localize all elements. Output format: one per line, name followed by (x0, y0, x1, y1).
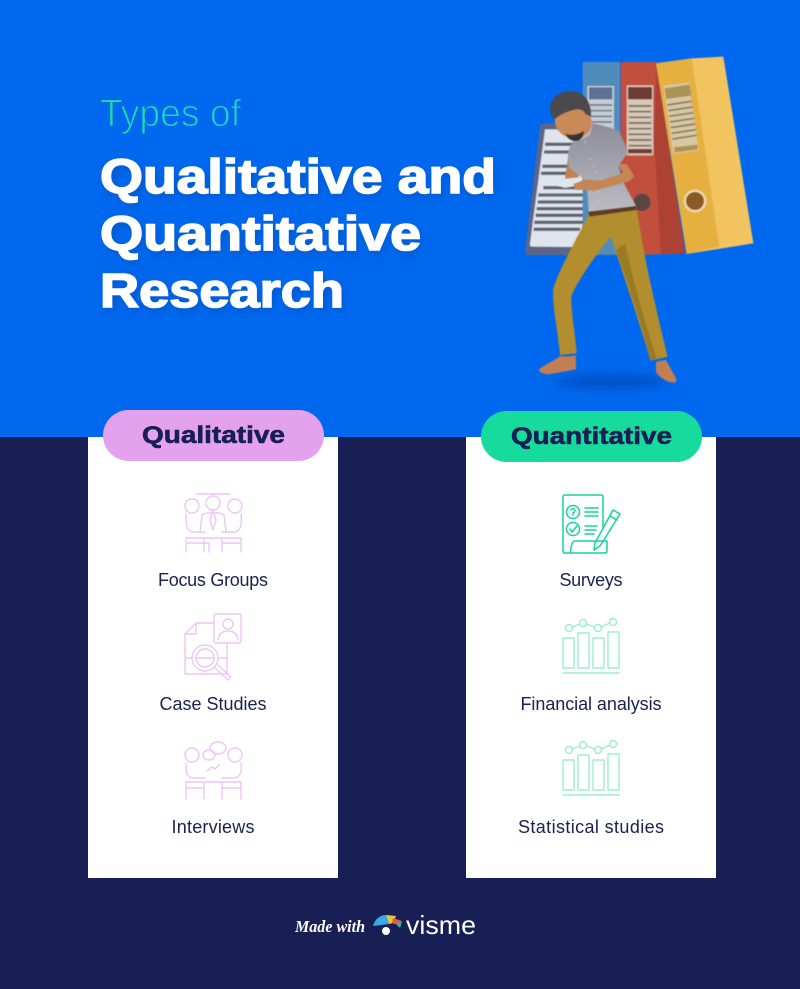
panel: quantitative (466, 411, 716, 878)
pill heading: Quantitative: Quantitative (511, 423, 672, 450)
label: Statistical studies: Statistical studies (518, 817, 664, 837)
card background (466, 437, 716, 878)
title: Research (100, 265, 344, 318)
title: Qualitative and (103, 155, 497, 208)
pill heading: Qualitative (103, 410, 324, 461)
floor shadow (553, 375, 667, 388)
label: Financial analysis: Financial analysis (520, 694, 662, 714)
label: Focus Groups: Focus Groups (158, 570, 268, 590)
man (539, 91, 677, 383)
shoes (539, 355, 576, 374)
head (550, 100, 597, 144)
binder: blue (583, 62, 620, 255)
pill heading: Quantitative (481, 411, 702, 462)
icon: interviews (185, 742, 242, 799)
icon: bar chart financial (563, 618, 619, 673)
header background (0, 0, 800, 437)
label: Interviews: Interviews (172, 817, 254, 837)
shirt (568, 123, 636, 213)
icon: bar chart statistical (563, 740, 619, 795)
icon: case studies (185, 614, 241, 680)
phone (557, 180, 586, 188)
pill heading: Qualitative: Qualitative (142, 422, 285, 449)
buttons (585, 142, 598, 208)
footer: made with visme (294, 910, 476, 940)
right arm (573, 164, 634, 191)
title: Quantitative (103, 212, 423, 265)
label: Surveys: Surveys (560, 570, 622, 590)
icon: visme logo (373, 915, 402, 935)
neck (581, 120, 593, 140)
illustration: man with binders (525, 57, 753, 388)
title (100, 151, 497, 322)
icon: survey (563, 495, 620, 553)
label: Case Studies: Case Studies (160, 694, 266, 714)
icon: focus group (185, 494, 242, 552)
left forearm (565, 155, 582, 179)
subtitle: Types of: Types of (100, 93, 241, 135)
title: Quantitative (100, 208, 421, 261)
belt (588, 206, 637, 217)
clipboard (525, 123, 620, 255)
binder: yellow (656, 57, 753, 254)
title: Qualitative and (100, 151, 496, 204)
footer: made with visme: Made with (294, 917, 365, 936)
card background (88, 437, 338, 878)
binder: red (621, 62, 685, 255)
footer: made with visme: visme (406, 910, 476, 940)
panel: qualitative (88, 410, 338, 878)
lower background (0, 437, 800, 989)
trousers (553, 207, 668, 361)
title: Research (103, 269, 346, 322)
